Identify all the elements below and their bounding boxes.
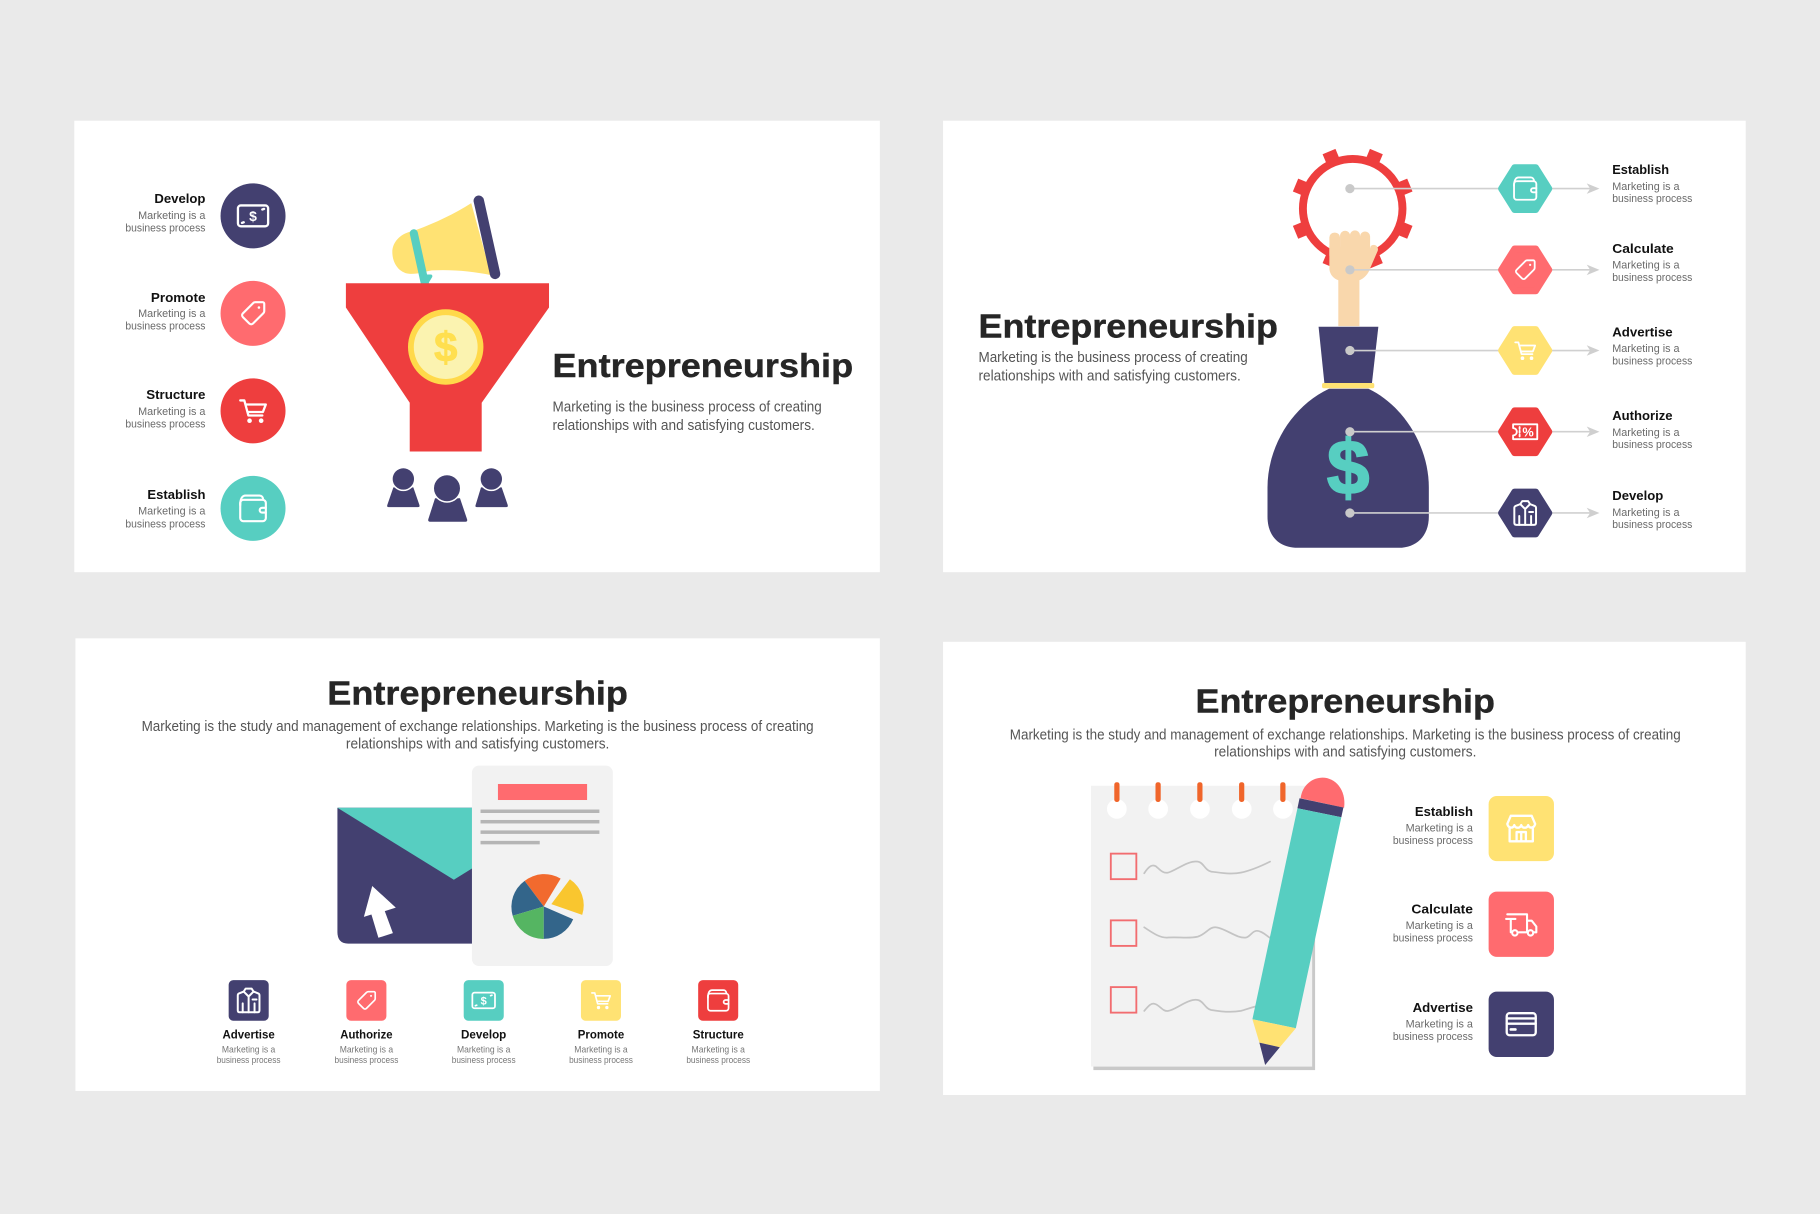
list item: Develop — [125, 183, 286, 248]
panel: notebook slide — [943, 642, 1746, 1095]
hexagon item: Calculate — [1502, 241, 1693, 291]
list item: Promote — [125, 281, 286, 346]
list item: Establish: business process — [125, 518, 206, 530]
panel 1 background — [74, 121, 880, 572]
description — [1010, 727, 1681, 761]
list item: Promote: Promote — [151, 290, 205, 305]
item: Advertise — [1393, 992, 1554, 1057]
item: Develop: $ — [481, 996, 487, 1008]
list item: Establish: Establish — [147, 487, 205, 502]
panel: email and report slide — [75, 638, 880, 1091]
item: Calculate: business process — [1393, 932, 1473, 944]
icon: megaphone — [392, 201, 495, 283]
hexagon item: Authorize: business process — [1612, 439, 1693, 451]
hexagon item: Establish: business process — [1612, 193, 1693, 205]
item: Establish: Marketing is a — [1406, 823, 1474, 835]
icon: gear — [1293, 149, 1413, 268]
icon: report document with pie chart — [472, 766, 613, 966]
panel: money bag slide — [943, 121, 1746, 572]
connector: Calculate — [1345, 265, 1599, 275]
hexagon item: Authorize: Marketing is a — [1612, 427, 1680, 439]
connector: Develop — [1345, 508, 1599, 518]
icon: three customers — [387, 467, 508, 522]
heading: Entrepreneurship — [552, 348, 853, 385]
description: relationships with and satisfying customers. — [1214, 745, 1476, 761]
hexagon item: Establish: Establish — [1612, 162, 1669, 177]
hexagon item: Authorize — [1502, 408, 1693, 453]
item: Establish: business process — [1393, 835, 1473, 847]
description: Marketing is the study and management of exchange relationships. Marketing is the business process of creating — [1010, 727, 1681, 743]
connector: Authorize — [1345, 427, 1599, 437]
description: relationships with and satisfying customers. — [346, 737, 609, 753]
description — [978, 350, 1248, 385]
description: Marketing is the business process of creating — [552, 399, 822, 415]
hexagon item: Calculate: Calculate — [1612, 241, 1674, 256]
item: Promote: business process — [569, 1055, 633, 1065]
icon: money bag: $ — [1327, 426, 1369, 511]
list item: Structure — [125, 378, 286, 443]
description: Marketing is the study and management of exchange relationships. Marketing is the business process of creating — [142, 719, 814, 735]
item: Establish: Establish — [1415, 804, 1473, 819]
list item: Establish — [125, 476, 286, 541]
list item: Establish: Marketing is a — [138, 506, 206, 518]
icon: money bag — [1268, 327, 1429, 548]
description — [142, 719, 814, 753]
item: Calculate: Calculate — [1411, 901, 1473, 916]
icon: raised hand — [1329, 230, 1378, 326]
description: relationships with and satisfying customers. — [978, 369, 1241, 385]
list item: Develop: Develop — [154, 191, 205, 206]
item: Authorize: Authorize — [340, 1028, 393, 1042]
hexagon item: Calculate: Marketing is a — [1612, 260, 1680, 272]
item: Advertise: Marketing is a — [1406, 1019, 1474, 1031]
item: Structure: business process — [686, 1055, 750, 1065]
hexagon item: Authorize: % — [1522, 424, 1534, 439]
list item: Develop: business process — [125, 223, 206, 235]
icon: funnel with coin — [346, 283, 549, 451]
hexagon item: Establish: Marketing is a — [1612, 181, 1680, 193]
item: Calculate: Marketing is a — [1406, 920, 1474, 932]
item: Authorize — [335, 980, 399, 1065]
hexagon item: Advertise: business process — [1612, 355, 1693, 367]
panel 4 background — [943, 642, 1746, 1095]
hexagon item: Authorize: Authorize — [1612, 408, 1673, 423]
item: Develop: Develop — [461, 1028, 506, 1042]
hexagon item: Advertise: Advertise — [1612, 325, 1673, 340]
item: Develop: business process — [452, 1055, 516, 1065]
hexagon item: Develop — [1502, 488, 1693, 534]
item: Advertise: Advertise — [223, 1028, 275, 1042]
item: Authorize: Marketing is a — [340, 1045, 394, 1055]
item: Advertise: Marketing is a — [222, 1045, 276, 1055]
panel 2 background — [943, 121, 1746, 572]
heading: Entrepreneurship — [978, 309, 1278, 346]
list item: Develop: Marketing is a — [138, 210, 206, 222]
list item: Promote: business process — [125, 321, 206, 333]
item: Promote — [569, 980, 633, 1065]
hexagon item: Calculate: business process — [1612, 272, 1693, 284]
list item: Promote: Marketing is a — [138, 308, 206, 320]
heading: Entrepreneurship — [327, 675, 628, 712]
connector: Establish — [1345, 183, 1599, 194]
connector: Advertise — [1345, 345, 1599, 356]
list item: Structure: business process — [125, 419, 206, 431]
item: Advertise — [217, 980, 281, 1065]
description: Marketing is the business process of creating — [978, 350, 1248, 366]
item: Promote: Marketing is a — [574, 1045, 628, 1055]
list item: Structure: Structure — [146, 387, 205, 402]
item: Advertise: Advertise — [1413, 1000, 1473, 1015]
icon: pencil — [1252, 778, 1344, 1065]
item: Structure — [686, 980, 750, 1065]
item: Establish — [1393, 796, 1554, 861]
hexagon item: Develop: business process — [1612, 519, 1693, 531]
panel 3 background — [75, 638, 880, 1091]
item: Calculate — [1393, 892, 1554, 957]
item: Advertise: business process — [1393, 1031, 1473, 1043]
item: Structure: Marketing is a — [692, 1045, 746, 1055]
item: Structure: Structure — [693, 1028, 744, 1042]
icon: notebook checklist — [1091, 782, 1315, 1070]
item: Promote: Promote — [578, 1028, 625, 1042]
hexagon item: Establish — [1502, 162, 1693, 209]
hexagon item: Advertise — [1502, 325, 1693, 371]
item: Advertise: business process — [217, 1055, 281, 1065]
list item: Develop: $ — [249, 208, 257, 224]
hexagon item: Develop: Develop — [1612, 488, 1663, 503]
panel: funnel slide — [74, 121, 880, 572]
item: Develop — [452, 980, 516, 1065]
item: Authorize: business process — [335, 1055, 399, 1065]
heading: Entrepreneurship — [1196, 684, 1495, 721]
description: relationships with and satisfying customers. — [552, 418, 815, 434]
hexagon item: Advertise: Marketing is a — [1612, 343, 1680, 355]
icon: funnel with coin: $ — [434, 324, 457, 371]
hexagon item: Develop: Marketing is a — [1612, 507, 1680, 519]
list item: Structure: Marketing is a — [138, 406, 206, 418]
description — [552, 399, 822, 434]
item: Develop: Marketing is a — [457, 1045, 511, 1055]
icon: envelope with cursor — [337, 808, 488, 944]
